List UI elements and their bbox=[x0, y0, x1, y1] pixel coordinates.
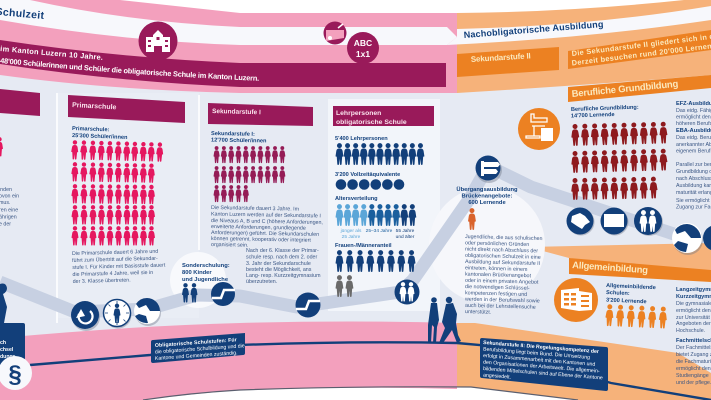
icon: paragraph bbox=[0, 356, 32, 390]
icon: clock with person bbox=[104, 300, 132, 328]
icon: stairs second bbox=[296, 292, 320, 318]
text: transition to gymnasium: besteht die Möglichkeit, ans bbox=[246, 267, 312, 273]
icon: ABC 1x1 bbox=[347, 32, 379, 64]
stat: Sekundarstufe pupils bbox=[211, 131, 267, 144]
text: bridge description: eintreten, können in einem bbox=[465, 265, 528, 273]
white arrow: obligatory schooling bbox=[0, 0, 457, 45]
text: vocational right column bbox=[676, 101, 711, 210]
text: legal basis fragment bbox=[0, 340, 18, 360]
panel: vocational education bbox=[566, 75, 711, 255]
banner: teachers bbox=[333, 106, 434, 126]
white circle: special needs bbox=[170, 252, 226, 308]
stat: general schools bbox=[606, 283, 656, 305]
icon: couple right bbox=[634, 207, 663, 236]
panel: Primarschule bbox=[68, 95, 185, 285]
stat: teacher count: 5'400 Lehrpersonen bbox=[335, 136, 388, 142]
stat: vocational learners: 14'700 Lernende bbox=[571, 112, 615, 119]
bottom edge shadow bbox=[143, 387, 578, 400]
label: bridge programmes: Übergangsausbildung bbox=[456, 186, 518, 193]
pictogram: Sekundarstufe pupils bbox=[214, 146, 285, 202]
callout: Sekundarstufe II governance: erfolgt in Zusammenarbeit mit den Kantonen und bbox=[483, 353, 596, 368]
label: special needs schooling: und Jugendliche bbox=[182, 277, 229, 283]
text: bridge description: werden in der Berufswahl sowie bbox=[465, 297, 540, 304]
stat: Primarschule pupils bbox=[72, 126, 128, 141]
text: Sekundarstufe description: können getrennt, kooperativ oder integriert bbox=[211, 236, 311, 244]
heading: gender share: Frauen-/Männeranteil bbox=[335, 243, 392, 249]
orange wedge between panels bbox=[528, 243, 711, 280]
heading: Primarschule: Primarschule bbox=[72, 102, 117, 111]
text: Sekundarstufe description: die Niveaus A, B und C (höhere Anforderungen, bbox=[211, 218, 323, 226]
learning path ribbon bbox=[0, 166, 686, 312]
pictogram: men bbox=[336, 275, 353, 297]
panel: bottom orange band bbox=[457, 323, 711, 400]
text: Primarschule description: Die Primarschule dauert 6 Jahre und bbox=[72, 249, 158, 257]
text: bridge description: kompetenzen festigen und bbox=[465, 290, 527, 298]
banner text: schooling facts: im Kanton Luzern 10 Jahre. bbox=[0, 46, 102, 60]
label: Sekundarstufe II: Sekundarstufe II bbox=[471, 51, 531, 64]
pictogram: teachers bbox=[336, 143, 424, 165]
icon: Switzerland map bbox=[566, 208, 594, 236]
panel: obligatory schooling header band: 48'000 Schülerinnen und Schüler die obligatorische Schule im Kanton Luzern. bbox=[0, 58, 259, 81]
label: special needs schooling: 800 Kinder bbox=[182, 270, 212, 276]
callout: legal basis left bbox=[0, 284, 32, 390]
text: transition to gymnasium: Nach der 6. Klasse der Primar- bbox=[246, 248, 319, 254]
text: Sekundarstufe description: Die Sekundarstufe dauert 3 Jahre. Im bbox=[211, 205, 300, 213]
heading: teachers: Lehrpersonen bbox=[336, 110, 381, 117]
icon: walking couple bbox=[428, 297, 461, 343]
heading: Sekundarstufe I: Sekundarstufe I bbox=[212, 108, 261, 116]
text: Sekundarstufe description: organisiert sein. bbox=[211, 242, 248, 249]
text: bridge description: die notwendigen Schlüssel- bbox=[465, 284, 530, 292]
text: general education right column bbox=[676, 287, 711, 386]
icon: trades bbox=[518, 108, 560, 150]
text: general education right column: ermöglicht den bbox=[676, 366, 711, 372]
text: transition to gymnasium: schule resp. nach dem 2. oder bbox=[246, 254, 317, 260]
stat: Primarschule pupils: 25'300 Schüler/innen bbox=[72, 133, 128, 141]
stat: Sekundarstufe pupils: 12'700 Schüler/innen bbox=[211, 138, 267, 144]
text: Primarschule description: stufe I. Für Kinder mit Basisstufe dauert bbox=[72, 263, 166, 271]
pictogram: Primarschule pupils bbox=[71, 140, 163, 245]
text: Primarschule description: führt zum Übertritt auf die Sekundar- bbox=[72, 255, 158, 264]
text: transition to gymnasium: 3. Jahr der Sekundarschule bbox=[246, 261, 311, 267]
callout: bridge programmes bbox=[456, 156, 543, 316]
text: transition to gymnasium bbox=[246, 248, 321, 285]
text: Sekundarstufe description: erweiterte Anforderungen, grundlegende bbox=[211, 224, 306, 232]
heading: age distribution: Altersverteilung bbox=[335, 196, 378, 202]
panel: post-compulsory header band bbox=[447, 0, 711, 93]
text: bridge description: kantonalen Brückenangebot bbox=[465, 272, 532, 279]
callout: Obligatorische Schulstufen bbox=[151, 333, 245, 363]
text: legal basis fragment: dungs- bbox=[0, 354, 18, 360]
icon: edge circle right bbox=[703, 225, 711, 251]
text: legal basis fragment: chsel bbox=[0, 347, 14, 353]
labels: age groups: 55 Jahre bbox=[396, 228, 415, 234]
label: bridge programmes: Brückenangebote: bbox=[462, 194, 513, 200]
callout: Sekundarstufe II governance: den Organisationen der Arbeitswelt. Die allgemein- bbox=[483, 360, 600, 375]
banner: Primarschule bbox=[68, 95, 185, 123]
text: bridge description: oder in einem privaten Angebot bbox=[465, 278, 539, 286]
pictogram: general schools bbox=[605, 304, 667, 329]
top icons group bbox=[138, 22, 379, 64]
text: bridge description: unterstützt. bbox=[465, 309, 491, 316]
icon: ABC 1x1: 1x1 bbox=[356, 49, 370, 59]
callout: Obligatorische Schulstufen: Obligatorische Schulstufen: Für bbox=[155, 337, 237, 349]
labels: age groups: und älter bbox=[396, 234, 415, 240]
paragraph glyph: § bbox=[8, 361, 22, 388]
stat: vocational learners: Berufliche Grundbildung: bbox=[571, 105, 639, 113]
icon: couple bbox=[394, 280, 420, 304]
icon: pink person bbox=[0, 137, 3, 156]
text: general education right column: Studiengänge bbox=[676, 373, 709, 379]
labels: age groups: 25–34 Jahre bbox=[366, 228, 393, 234]
central grey backdrop bbox=[0, 70, 711, 380]
white band: post-compulsory bbox=[447, 6, 711, 45]
panel: obligatory schooling header band bbox=[0, 0, 457, 93]
label: bridge programmes bbox=[456, 186, 518, 206]
text: Primarschule description bbox=[72, 249, 166, 285]
icon: classroom bbox=[324, 22, 346, 44]
icon: briefcase bbox=[600, 208, 628, 236]
text: Sekundarstufe description: Kanton Luzern werden auf der Sekundarstufe I bbox=[211, 212, 321, 219]
stat: vocational learners bbox=[571, 105, 639, 119]
icon: refresh bbox=[71, 301, 100, 331]
timeline line bbox=[30, 342, 711, 400]
labels: age groups: 25 Jahre bbox=[342, 234, 361, 240]
icon: stairs bbox=[211, 282, 235, 306]
pictogram: women bbox=[336, 250, 416, 272]
labels: age groups bbox=[340, 228, 415, 240]
heading: Berufliche Grundbildung: Berufliche Grundbildung bbox=[571, 79, 679, 100]
pictogram: vocational learners bbox=[571, 122, 668, 200]
stat: general schools: Allgemeinbildende bbox=[606, 283, 656, 291]
text: Primarschule description: die Primarstufe 4 Jahre, weil sie in bbox=[72, 270, 153, 278]
icon: ABC 1x1: ABC bbox=[354, 38, 372, 48]
panel: bottom pink band bbox=[0, 322, 457, 400]
stat: general schools: Schulen: bbox=[606, 290, 630, 297]
stat: general schools: 3'200 Lernende bbox=[606, 298, 647, 305]
heading: teachers: obligatorische Schule bbox=[336, 119, 407, 126]
white circle: bridge programmes bbox=[429, 187, 545, 303]
text: bridge description: oder persönlichen Gründen bbox=[465, 240, 529, 248]
callout: Sekundarstufe II governance: bildenden Mittelschulen sind auf Ebene der Kantone bbox=[483, 366, 603, 381]
text: left column bbox=[0, 187, 19, 228]
icon: orange person bbox=[468, 208, 476, 230]
text: legal basis fragment: ch bbox=[0, 340, 6, 346]
light column: Primarschule bbox=[57, 93, 199, 318]
callout: Sekundarstufe II governance: Sekundarstufe II: Die Regelungskompetenz der bbox=[483, 340, 599, 355]
callout: Obligatorische Schulstufen: die obligatorische Schulbildung und die bbox=[155, 343, 245, 355]
banner: left column bbox=[0, 89, 40, 116]
text: general education right column: und der pflege. bbox=[676, 380, 711, 386]
stat: Primarschule pupils: Primarschule: bbox=[72, 126, 110, 133]
box: Sekundarstufe II bbox=[457, 47, 559, 77]
text: Sekundarstufe description bbox=[211, 205, 323, 249]
callout: Obligatorische Schulstufen: Kantone und Gemeinden zuständig. bbox=[155, 350, 238, 362]
column dividers bbox=[57, 93, 199, 323]
text: Primarschule description: der 3. Klasse übertreten. bbox=[73, 277, 131, 285]
banner: schooling facts bbox=[0, 40, 446, 87]
stat: Sekundarstufe pupils: Sekundarstufe I: bbox=[211, 131, 255, 138]
text: bridge description: nicht direkt nach Abschluss der bbox=[465, 247, 538, 254]
text: transition to gymnasium: Lang- resp. Kurzzeitgymnasium bbox=[246, 273, 321, 279]
label: special needs schooling bbox=[182, 263, 230, 283]
text: bridge description: Ausbildung auf Sekundarstufe II bbox=[465, 259, 540, 267]
labels: age groups: jünger als bbox=[340, 228, 362, 234]
icon: person at left edge bbox=[0, 284, 7, 323]
text: Sekundarstufe description: Anforderungen) geführt. Die Sekundarschulen bbox=[211, 230, 319, 238]
panel: Sekundarstufe I bbox=[208, 103, 323, 285]
box: secondary level intro bbox=[568, 30, 711, 69]
banner: Sekundarstufe I bbox=[208, 103, 313, 126]
banner: Berufliche Grundbildung bbox=[568, 75, 711, 102]
icon: two children bbox=[182, 283, 198, 302]
label: bridge programmes: 600 Lernende bbox=[468, 200, 506, 206]
heading: teachers bbox=[336, 110, 407, 126]
icon: globe bbox=[134, 298, 161, 326]
panel: left partial column bbox=[0, 89, 40, 228]
panel: teachers bbox=[333, 106, 434, 297]
pictogram: full-time equivalents bbox=[336, 179, 404, 190]
panel: general education bbox=[554, 258, 711, 386]
icon: signpost bbox=[476, 156, 502, 183]
text: transition to gymnasium: überzutreten. bbox=[246, 279, 277, 285]
banner: Allgemeinbildung bbox=[569, 258, 711, 282]
icon: school building bbox=[138, 22, 178, 60]
label: special needs schooling: Sonderschulung: bbox=[182, 263, 230, 269]
stat: full-time equivalents: 3'200 Vollzeitäquivalente bbox=[335, 172, 400, 178]
callout: Sekundarstufe II governance: Berufsbildung liegt beim Bund. Die Umsetzung bbox=[483, 347, 590, 361]
heading: Allgemeinbildung: Allgemeinbildung bbox=[572, 260, 649, 276]
text: bridge description: Jugendliche, die aus schulischen bbox=[465, 234, 543, 242]
heading: Nachobligatorische Ausbildung: Nachobligatorische Ausbildung bbox=[463, 19, 604, 40]
text: general education right column: Hochschule. bbox=[676, 328, 705, 334]
text: bridge description bbox=[465, 234, 543, 316]
text: general education right column: Angeboten der bbox=[676, 321, 711, 327]
callout: Sekundarstufe II governance: angesiedelt. bbox=[483, 373, 511, 381]
icon: globe right bbox=[672, 223, 703, 255]
text: bridge description: auch bei der Lehrstellensuche bbox=[465, 303, 536, 311]
callout: Sekundarstufe II governance bbox=[480, 338, 608, 391]
icon: school block bbox=[554, 278, 598, 322]
light column: teachers bbox=[328, 99, 440, 311]
callout: special needs schooling bbox=[182, 263, 235, 306]
text: bridge description: obligatorischen Schulzeit in eine bbox=[465, 253, 541, 261]
pictogram: age distribution bbox=[336, 204, 416, 226]
